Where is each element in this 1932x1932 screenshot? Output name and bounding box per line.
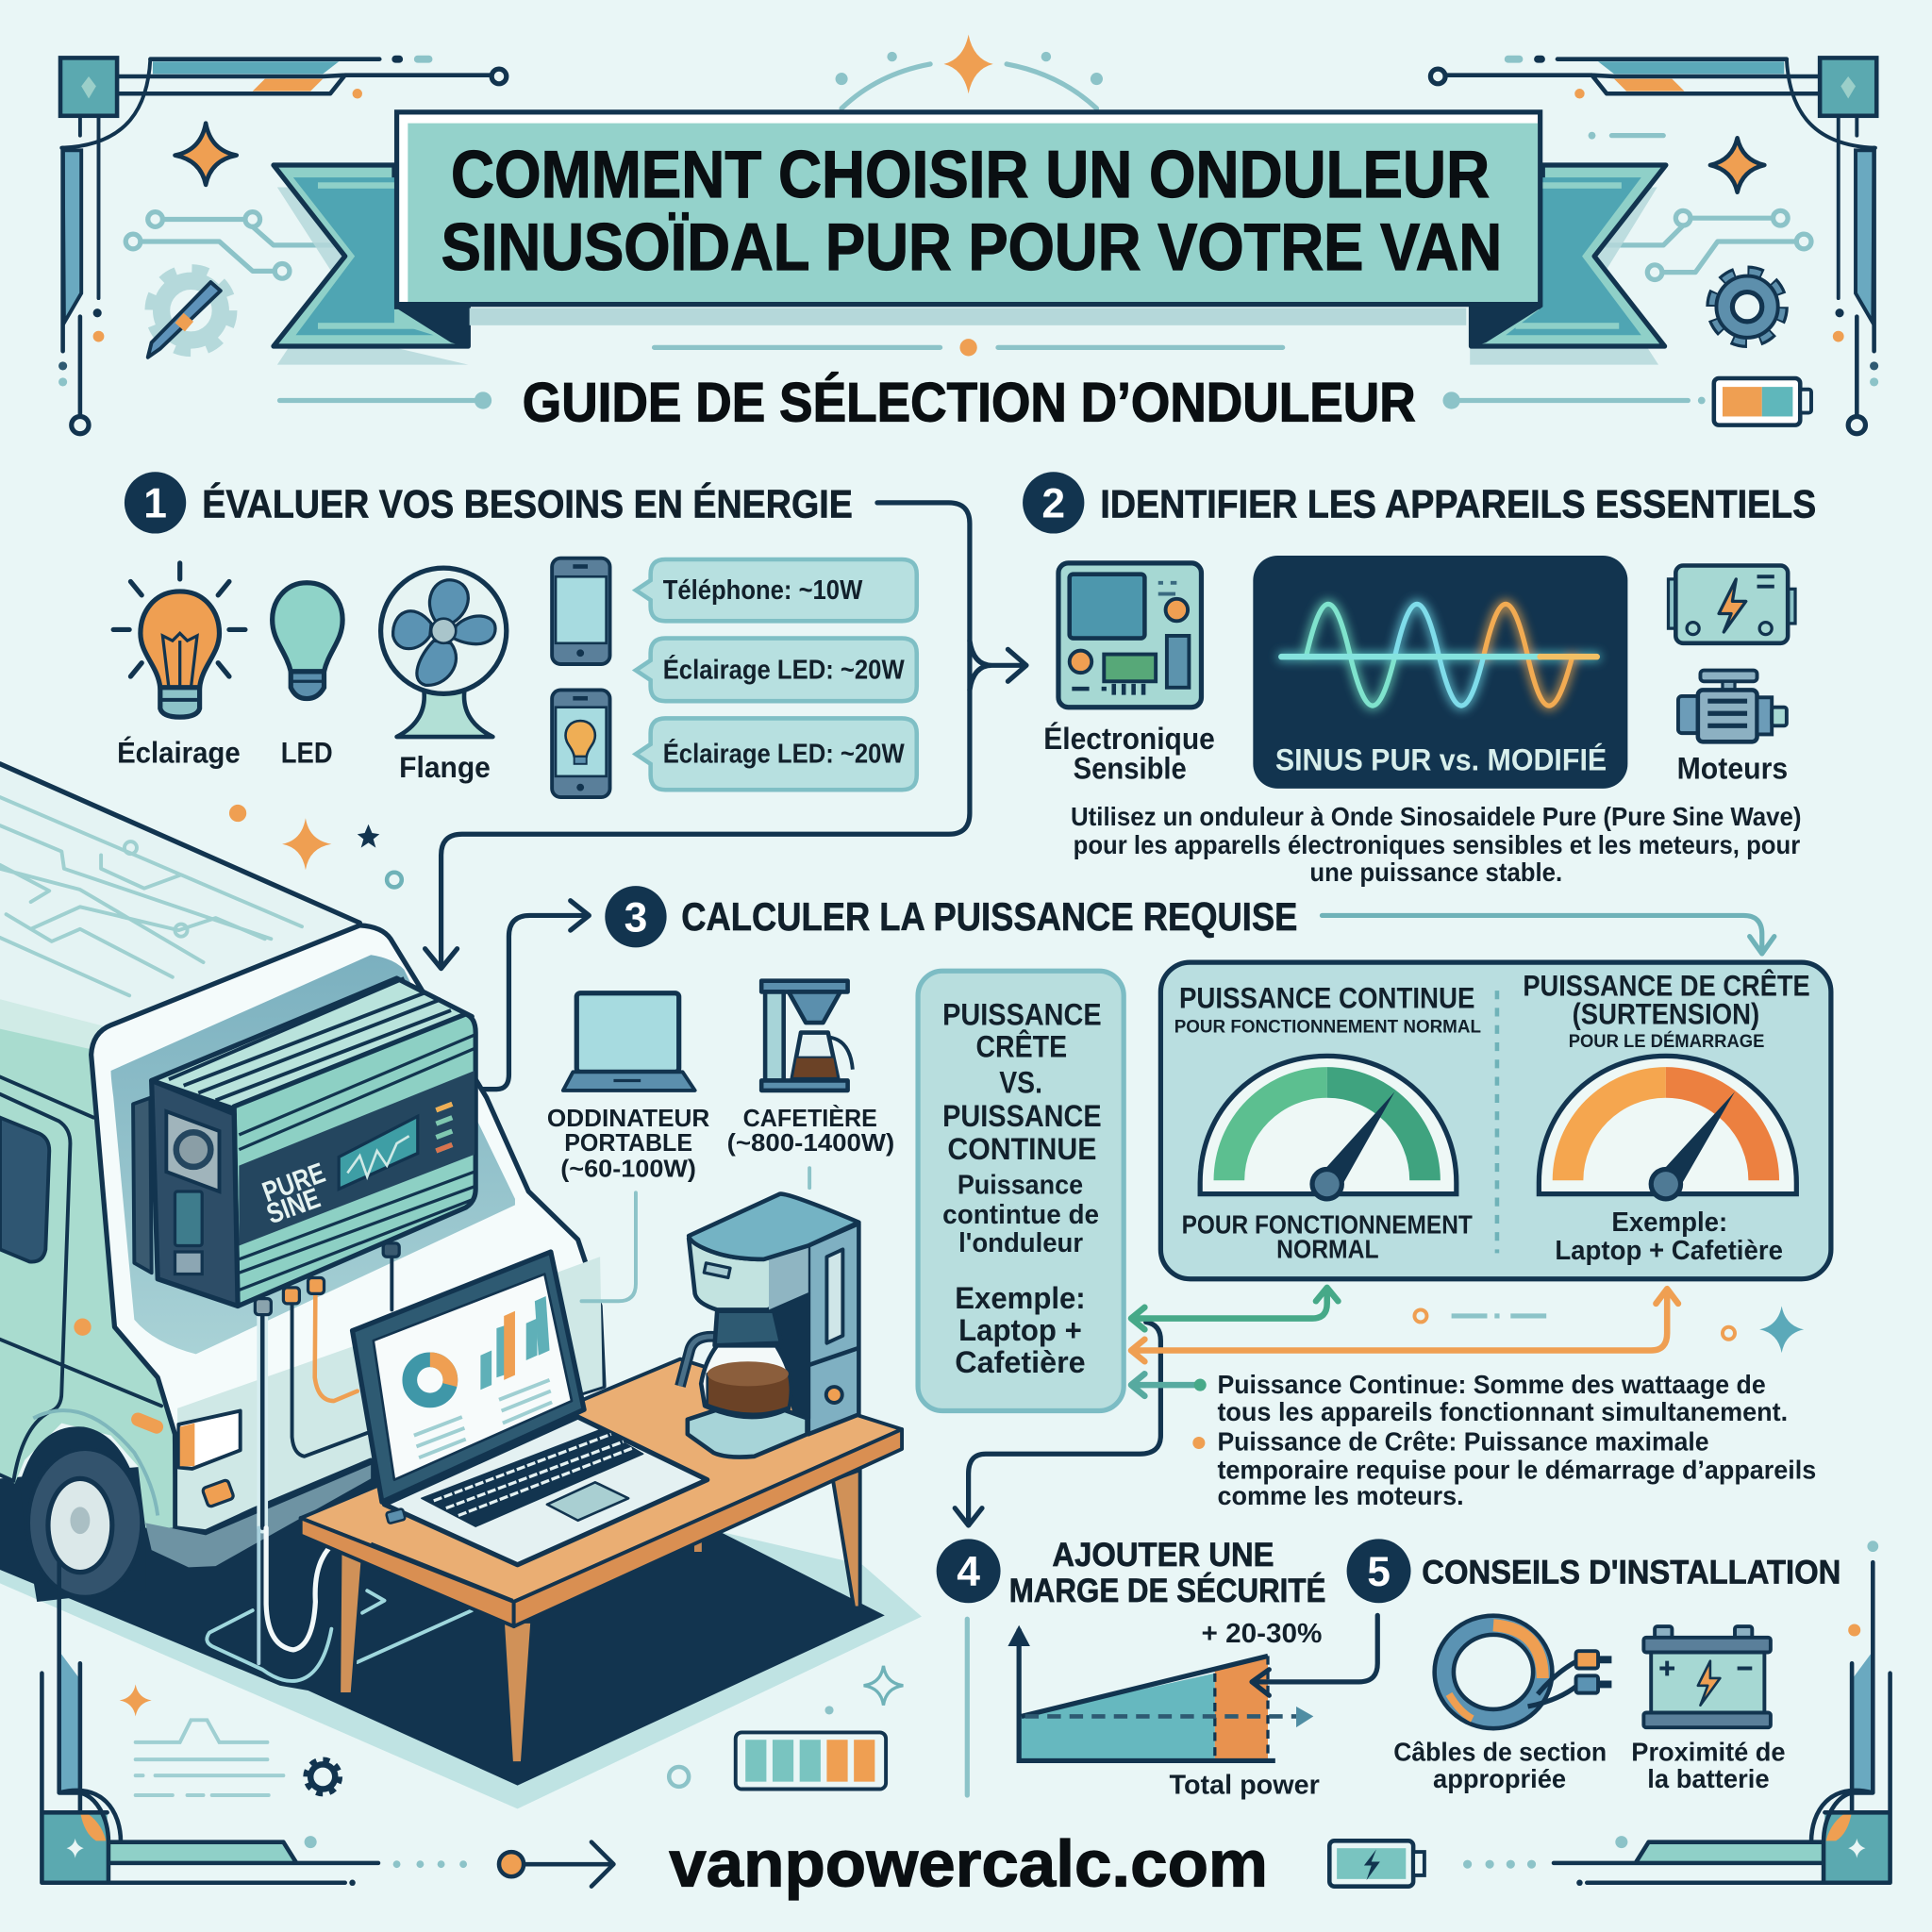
panel: pure sine wave bbox=[1253, 556, 1627, 789]
label: Éclairage: Éclairage bbox=[117, 736, 241, 769]
icon: sensitive electronics board bbox=[1058, 563, 1201, 708]
left ribbon tail bbox=[274, 165, 468, 365]
label: coffee maker wattage bbox=[727, 1104, 894, 1157]
cables bbox=[207, 1243, 472, 1681]
heading 5 bbox=[1347, 1539, 1840, 1603]
inverter bbox=[133, 978, 475, 1306]
label: LED: LED bbox=[281, 736, 333, 769]
heading 3 bbox=[605, 886, 1297, 947]
heading 4: MARGE DE SÉCURITÉ bbox=[1009, 1572, 1325, 1609]
gauge: peak power bbox=[1523, 968, 1810, 1266]
label: cables bbox=[1393, 1737, 1607, 1793]
label: battery proximity bbox=[1631, 1737, 1786, 1793]
interior bbox=[770, 1292, 808, 1418]
callout: phone wattage bbox=[636, 559, 917, 621]
panel: peak vs continuous: contintue de bbox=[942, 1200, 1099, 1230]
callout: LED wattage 2 bbox=[636, 718, 917, 790]
icon: footer battery bbox=[1329, 1840, 1424, 1887]
label: battery proximity: la batterie bbox=[1647, 1764, 1770, 1793]
label: Flange: Flange bbox=[399, 751, 491, 784]
arrow: step 3 to gauges bbox=[1322, 915, 1774, 954]
top left corner ornament bbox=[58, 56, 507, 434]
title text: COMMENT CHOISIR UN ONDULEUR bbox=[451, 137, 1490, 211]
label: battery proximity: Proximité de bbox=[1631, 1737, 1786, 1766]
chart: safety margin: Total power bbox=[1170, 1771, 1320, 1801]
footer right dots bbox=[1463, 1860, 1536, 1869]
label: Électronique Sensible: Électronique bbox=[1043, 721, 1215, 756]
arrow: step 1 to steps 2 and 3 bbox=[425, 503, 1026, 969]
panel: peak vs continuous: Exemple: bbox=[955, 1280, 1086, 1315]
heading 2 bbox=[1023, 472, 1816, 534]
section 3: required power bbox=[483, 886, 1831, 1525]
heading 4 bbox=[937, 1537, 1325, 1609]
bottom center ornaments: sparkle, ring, level meter bbox=[669, 1666, 903, 1787]
section 1: energy needs bbox=[113, 472, 917, 797]
laptop bbox=[353, 1252, 708, 1565]
base bbox=[688, 1398, 808, 1457]
gauge: continuous power: PUISSANCE CONTINUE bbox=[1179, 981, 1474, 1014]
chart: sine wave bbox=[1281, 604, 1597, 706]
section 5: installation tips bbox=[1252, 1539, 1840, 1793]
icon: power box bbox=[1668, 566, 1795, 643]
icon: laptop bbox=[563, 993, 695, 1091]
roof bbox=[0, 764, 359, 1026]
text: sine wave advice: une puissance stable. bbox=[1309, 858, 1562, 887]
bullet: peak power bbox=[1192, 1426, 1816, 1510]
heading 2: IDENTIFIER LES APPAREILS ESSENTIELS bbox=[1100, 482, 1816, 526]
icon: phone bbox=[552, 558, 610, 664]
text: sine wave advice bbox=[1071, 802, 1802, 887]
icon: coffee maker small bbox=[761, 981, 853, 1091]
panel: peak vs continuous: Puissance bbox=[958, 1171, 1083, 1201]
label: laptop wattage: ODDINATEUR bbox=[547, 1104, 709, 1132]
panel: peak vs continuous: l'onduleur bbox=[958, 1228, 1083, 1258]
title text: SINUSOÏDAL PUR POUR VOTRE VAN bbox=[441, 209, 1502, 284]
icon: orange bulb bbox=[113, 563, 245, 717]
head bbox=[689, 1239, 808, 1309]
panel: peak vs continuous bbox=[918, 971, 1124, 1411]
heading 3: CALCULER LA PUISSANCE REQUISE bbox=[681, 894, 1297, 939]
icon: battery top right bbox=[1714, 378, 1811, 425]
arrows: continuous and peak links bbox=[1131, 1288, 1678, 1396]
top right corner ornament bbox=[1430, 56, 1878, 434]
right ornaments: star, circuit, gear bbox=[1589, 132, 1811, 341]
label: Électronique Sensible: Sensible bbox=[1074, 750, 1187, 785]
heading 2: 2 bbox=[1041, 481, 1065, 527]
title text bbox=[441, 137, 1502, 284]
label: Moteurs: Moteurs bbox=[1677, 750, 1788, 785]
background sparkles by van bbox=[229, 805, 402, 887]
icon: phone with bulb bbox=[552, 690, 610, 797]
callout: LED wattage: Éclairage LED: ~20W bbox=[663, 654, 905, 686]
label: coffee maker wattage: (~800-1400W) bbox=[727, 1128, 894, 1157]
icon: fan bbox=[381, 568, 507, 737]
heading 1: ÉVALUER VOS BESOINS EN ÉNERGIE bbox=[202, 482, 853, 526]
label: laptop wattage bbox=[547, 1104, 709, 1182]
panel: peak vs continuous: Cafetière bbox=[955, 1344, 1086, 1379]
van side bbox=[0, 999, 175, 1528]
floor bbox=[0, 1441, 922, 1808]
arrow: step 3 to step 4 bbox=[955, 1322, 1160, 1525]
footer arrow bbox=[393, 1842, 613, 1887]
panel: peak vs continuous: PUISSANCE bbox=[942, 997, 1102, 1032]
label: PURE SINE bbox=[258, 1158, 329, 1230]
gauge: peak power: POUR LE DÉMARRAGE bbox=[1569, 1030, 1764, 1052]
heading 5: CONSEILS D'INSTALLATION bbox=[1422, 1554, 1840, 1591]
illustration: van, inverter, table, laptop, coffee maker bbox=[0, 764, 922, 1808]
bullet: continuous power: tous les appareils fonctionnant simultanement. bbox=[1217, 1397, 1788, 1426]
coffee maker bbox=[680, 1194, 858, 1457]
gauge: continuous power: NORMAL bbox=[1276, 1235, 1379, 1264]
arrow: step 5 to chart bbox=[1252, 1615, 1377, 1695]
panel: peak vs continuous: CRÊTE bbox=[975, 1029, 1067, 1064]
tower bbox=[808, 1224, 858, 1434]
icon: battery bbox=[1643, 1626, 1771, 1727]
text: sine wave advice: pour les apparells électroniques sensibles et les meteurs, pour bbox=[1074, 830, 1801, 859]
bottom right corner ornament bbox=[1554, 1562, 1890, 1886]
corner dots bbox=[1848, 1541, 1878, 1637]
gauge: peak power: PUISSANCE DE CRÊTE bbox=[1523, 968, 1810, 1002]
label: coffee maker wattage: CAFETIÈRE bbox=[743, 1104, 877, 1132]
panel: peak vs continuous: PUISSANCE bbox=[942, 1098, 1102, 1133]
panel: peak vs continuous: VS. bbox=[999, 1065, 1042, 1100]
label: Électronique Sensible bbox=[1043, 721, 1215, 785]
label: cables: Câbles de section bbox=[1393, 1737, 1607, 1766]
icon: level meter bbox=[736, 1732, 886, 1789]
bullet: peak power: comme les moteurs. bbox=[1217, 1481, 1464, 1510]
panel: peak vs continuous: Laptop + bbox=[958, 1312, 1082, 1347]
title banner bbox=[274, 112, 1666, 365]
heading 3: 3 bbox=[625, 894, 647, 941]
icon: cable coil bbox=[1444, 1625, 1611, 1719]
heading 1: 1 bbox=[143, 481, 167, 527]
bullet: peak power: Puissance de Crête: Puissance maximale bbox=[1217, 1426, 1709, 1456]
bottom left ornaments bbox=[120, 1684, 340, 1795]
callout: LED wattage bbox=[636, 639, 917, 701]
label: PURE SINE: PURE bbox=[258, 1158, 329, 1208]
footer url: vanpowercalc.com bbox=[669, 1827, 1268, 1901]
bullet: peak power: temporaire requise pour le démarrage d’appareils bbox=[1217, 1455, 1816, 1484]
heading 5: 5 bbox=[1367, 1549, 1391, 1595]
van body bbox=[0, 764, 604, 1602]
label: laptop wattage: PORTABLE bbox=[564, 1128, 692, 1157]
bullet: continuous power bbox=[1194, 1370, 1788, 1426]
connector lines bbox=[581, 1168, 809, 1301]
callout: LED wattage 2: Éclairage LED: ~20W bbox=[663, 737, 905, 769]
label: cables: appropriée bbox=[1433, 1764, 1566, 1793]
chart: safety margin bbox=[1008, 1619, 1322, 1801]
carafe bbox=[701, 1345, 791, 1417]
arrow: inverter to step 3 bbox=[483, 901, 589, 1090]
bottom left corner ornament bbox=[42, 1562, 378, 1886]
icon: motor bbox=[1678, 671, 1787, 741]
table bbox=[301, 1359, 902, 1763]
gauge: peak power: (SURTENSION) bbox=[1573, 997, 1759, 1030]
section 2: essential devices bbox=[1023, 472, 1816, 887]
gauge: peak power: Laptop + Cafetière bbox=[1555, 1236, 1783, 1266]
gauge: continuous power: POUR FONCTIONNEMENT bbox=[1182, 1209, 1473, 1239]
left ornaments: star, circuit, pen and gear bbox=[125, 124, 333, 358]
headlight bbox=[178, 1411, 241, 1507]
gauge: continuous power: POUR FONCTIONNEMENT NORMAL bbox=[1174, 1017, 1481, 1038]
laptop chart bbox=[409, 1296, 552, 1457]
label: laptop wattage: (~60-100W) bbox=[560, 1154, 696, 1182]
text: sine wave advice: Utilisez un onduleur à Onde Sinosaidele Pure (Pure Sine Wave) bbox=[1071, 802, 1802, 831]
wheel bbox=[20, 1410, 158, 1602]
subtitle bbox=[279, 339, 1706, 434]
top star and arcs bbox=[836, 35, 1103, 108]
section 4: safety margin bbox=[937, 1537, 1325, 1801]
panel: pure sine wave: SINUS PUR vs. MODIFIÉ bbox=[1275, 741, 1607, 776]
heading 1 bbox=[125, 472, 853, 534]
chart: safety margin: + 20-30% bbox=[1201, 1619, 1322, 1649]
small ornaments near arrows bbox=[1414, 1306, 1804, 1353]
label: PURE SINE: SINE bbox=[262, 1183, 325, 1230]
heading 4: AJOUTER UNE bbox=[1052, 1537, 1274, 1574]
icon: LED bulb bbox=[273, 583, 342, 699]
heading 4: 4 bbox=[957, 1549, 980, 1595]
gauge: continuous power bbox=[1174, 981, 1481, 1264]
right ribbon tail bbox=[1470, 165, 1666, 365]
gauge: peak power: Exemple: bbox=[1611, 1208, 1727, 1238]
callout: phone wattage: Téléphone: ~10W bbox=[663, 575, 863, 606]
subtitle: GUIDE DE SÉLECTION D’ONDULEUR bbox=[523, 372, 1416, 434]
cab bbox=[92, 925, 604, 1567]
bullet: continuous power: Puissance Continue: Somme des wattaage de bbox=[1217, 1370, 1766, 1399]
panel: gauges bbox=[1160, 962, 1831, 1279]
panel: peak vs continuous: CONTINUE bbox=[947, 1131, 1096, 1166]
